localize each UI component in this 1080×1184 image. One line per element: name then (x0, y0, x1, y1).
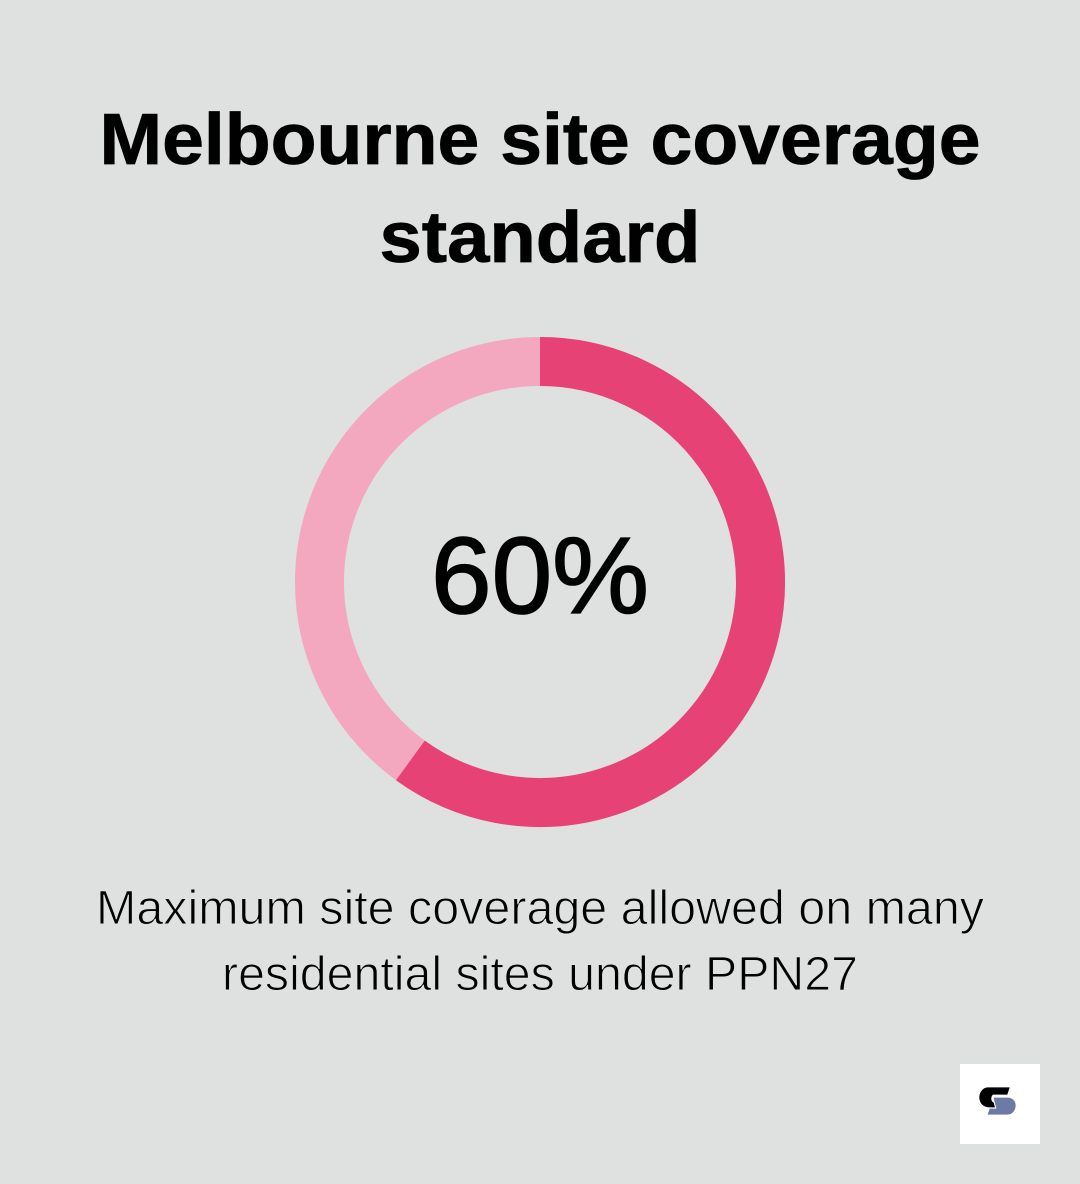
caption: Maximum site coverage allowed on many (96, 882, 984, 935)
logo mark (979, 1087, 1016, 1115)
donut value: 60% (431, 515, 649, 637)
donut remainder segment (320, 362, 760, 802)
title: Melbourne site coverage (100, 100, 980, 180)
caption: residential sites under PPN27 (222, 948, 858, 1001)
title: standard (380, 198, 700, 278)
donut chart: 60% (320, 362, 760, 802)
title (100, 100, 980, 278)
logo badge (960, 1064, 1040, 1144)
caption (96, 882, 984, 1001)
donut 60% segment (410, 362, 760, 802)
